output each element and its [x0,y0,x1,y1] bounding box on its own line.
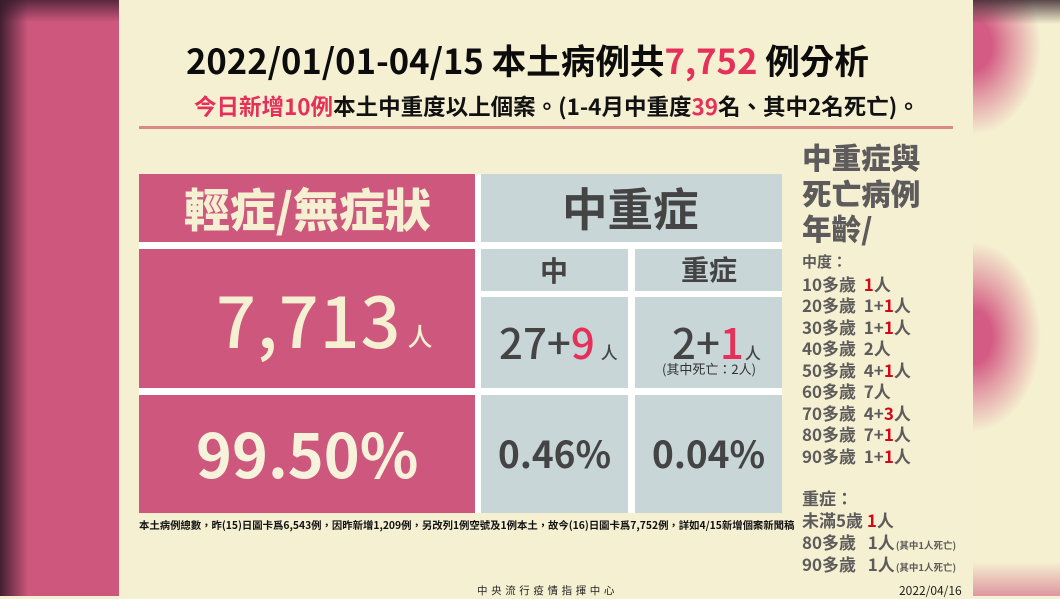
right blurred background band [973,0,1060,596]
panel: moderate percentage: 0.46% [498,425,611,479]
side heading: 中重症與 [802,135,920,178]
panel: severe count: 2+1人 [672,311,761,372]
side list: moderate ages: 70多歲 4+3人 [802,400,911,424]
panel: mild count [139,249,475,388]
panel: mild header: 輕症/無症狀 [184,175,431,241]
panel: moderate count [481,297,628,388]
panel: moderate-severe header: 中重症 [562,174,699,240]
side heading [802,135,920,249]
side list: moderate ages: 80多歲 7+1人 [802,421,911,446]
panel: severe header: 重症 [681,249,737,289]
panel: mild count: 7,713人 [216,268,433,369]
panel: moderate header [481,249,628,291]
panel: moderate count: 27+9 人 [499,311,618,372]
panel: severe header [635,249,782,291]
title: 2022/01/01-04/15 本土病例共7,752 例分析 [186,34,869,84]
side list: severe ages: 重症： [802,485,853,510]
panel: moderate header: 中 [540,250,568,290]
side list: moderate ages: 90多歲 1+1人 [802,442,911,468]
panel: mild percentage: 99.50% [196,407,419,496]
panel: severe count [635,297,782,388]
panel: severe percentage [635,395,782,513]
panel: mild percentage [139,395,475,513]
side list: severe ages: 80多歲 1人(其中1人死亡) [802,529,956,554]
side heading: 死亡病例 [802,170,920,214]
left blurred background band [0,0,119,596]
side heading: 年齡/ [802,206,873,249]
source: 中央流行疫情指揮中心 [477,583,618,598]
side list: severe ages: 未滿5歲 1人 [802,507,894,532]
footnote: 本土病例總數，昨(15)日圖卡爲6,543例，因昨新增1,209例，另改列1例空號及1例本土，故今(16)日圖卡爲7,752例，詳如4/15新增個案新聞稿 [139,517,794,532]
side list: moderate ages: 30多歲 1+1人 [802,314,911,338]
side list: moderate ages: 10多歲 1人 [802,270,891,296]
date: 2022/04/16 [899,582,962,599]
side list: moderate ages: 中度： [802,251,847,272]
side list: severe ages [802,485,956,576]
death note: (其中死亡：2人) [662,359,756,378]
side list: moderate ages [802,251,911,468]
side list: moderate ages: 50多歲 4+1人 [802,356,911,382]
side list: moderate ages: 60多歲 7人 [802,378,891,403]
side list: moderate ages: 40多歲 2人 [802,335,891,360]
side list: moderate ages: 20多歲 1+1人 [802,292,911,317]
panel: moderate percentage [481,395,628,513]
subtitle: 今日新增10例本土中重度以上個案。(1-4月中重度39名、其中2名死亡)。 [194,90,920,122]
panel: severe percentage: 0.04% [652,425,765,479]
side list: severe ages: 90多歲 1人(其中1人死亡) [802,551,956,576]
table [139,174,782,513]
panel: moderate-severe header [481,174,782,242]
divider [139,126,953,129]
